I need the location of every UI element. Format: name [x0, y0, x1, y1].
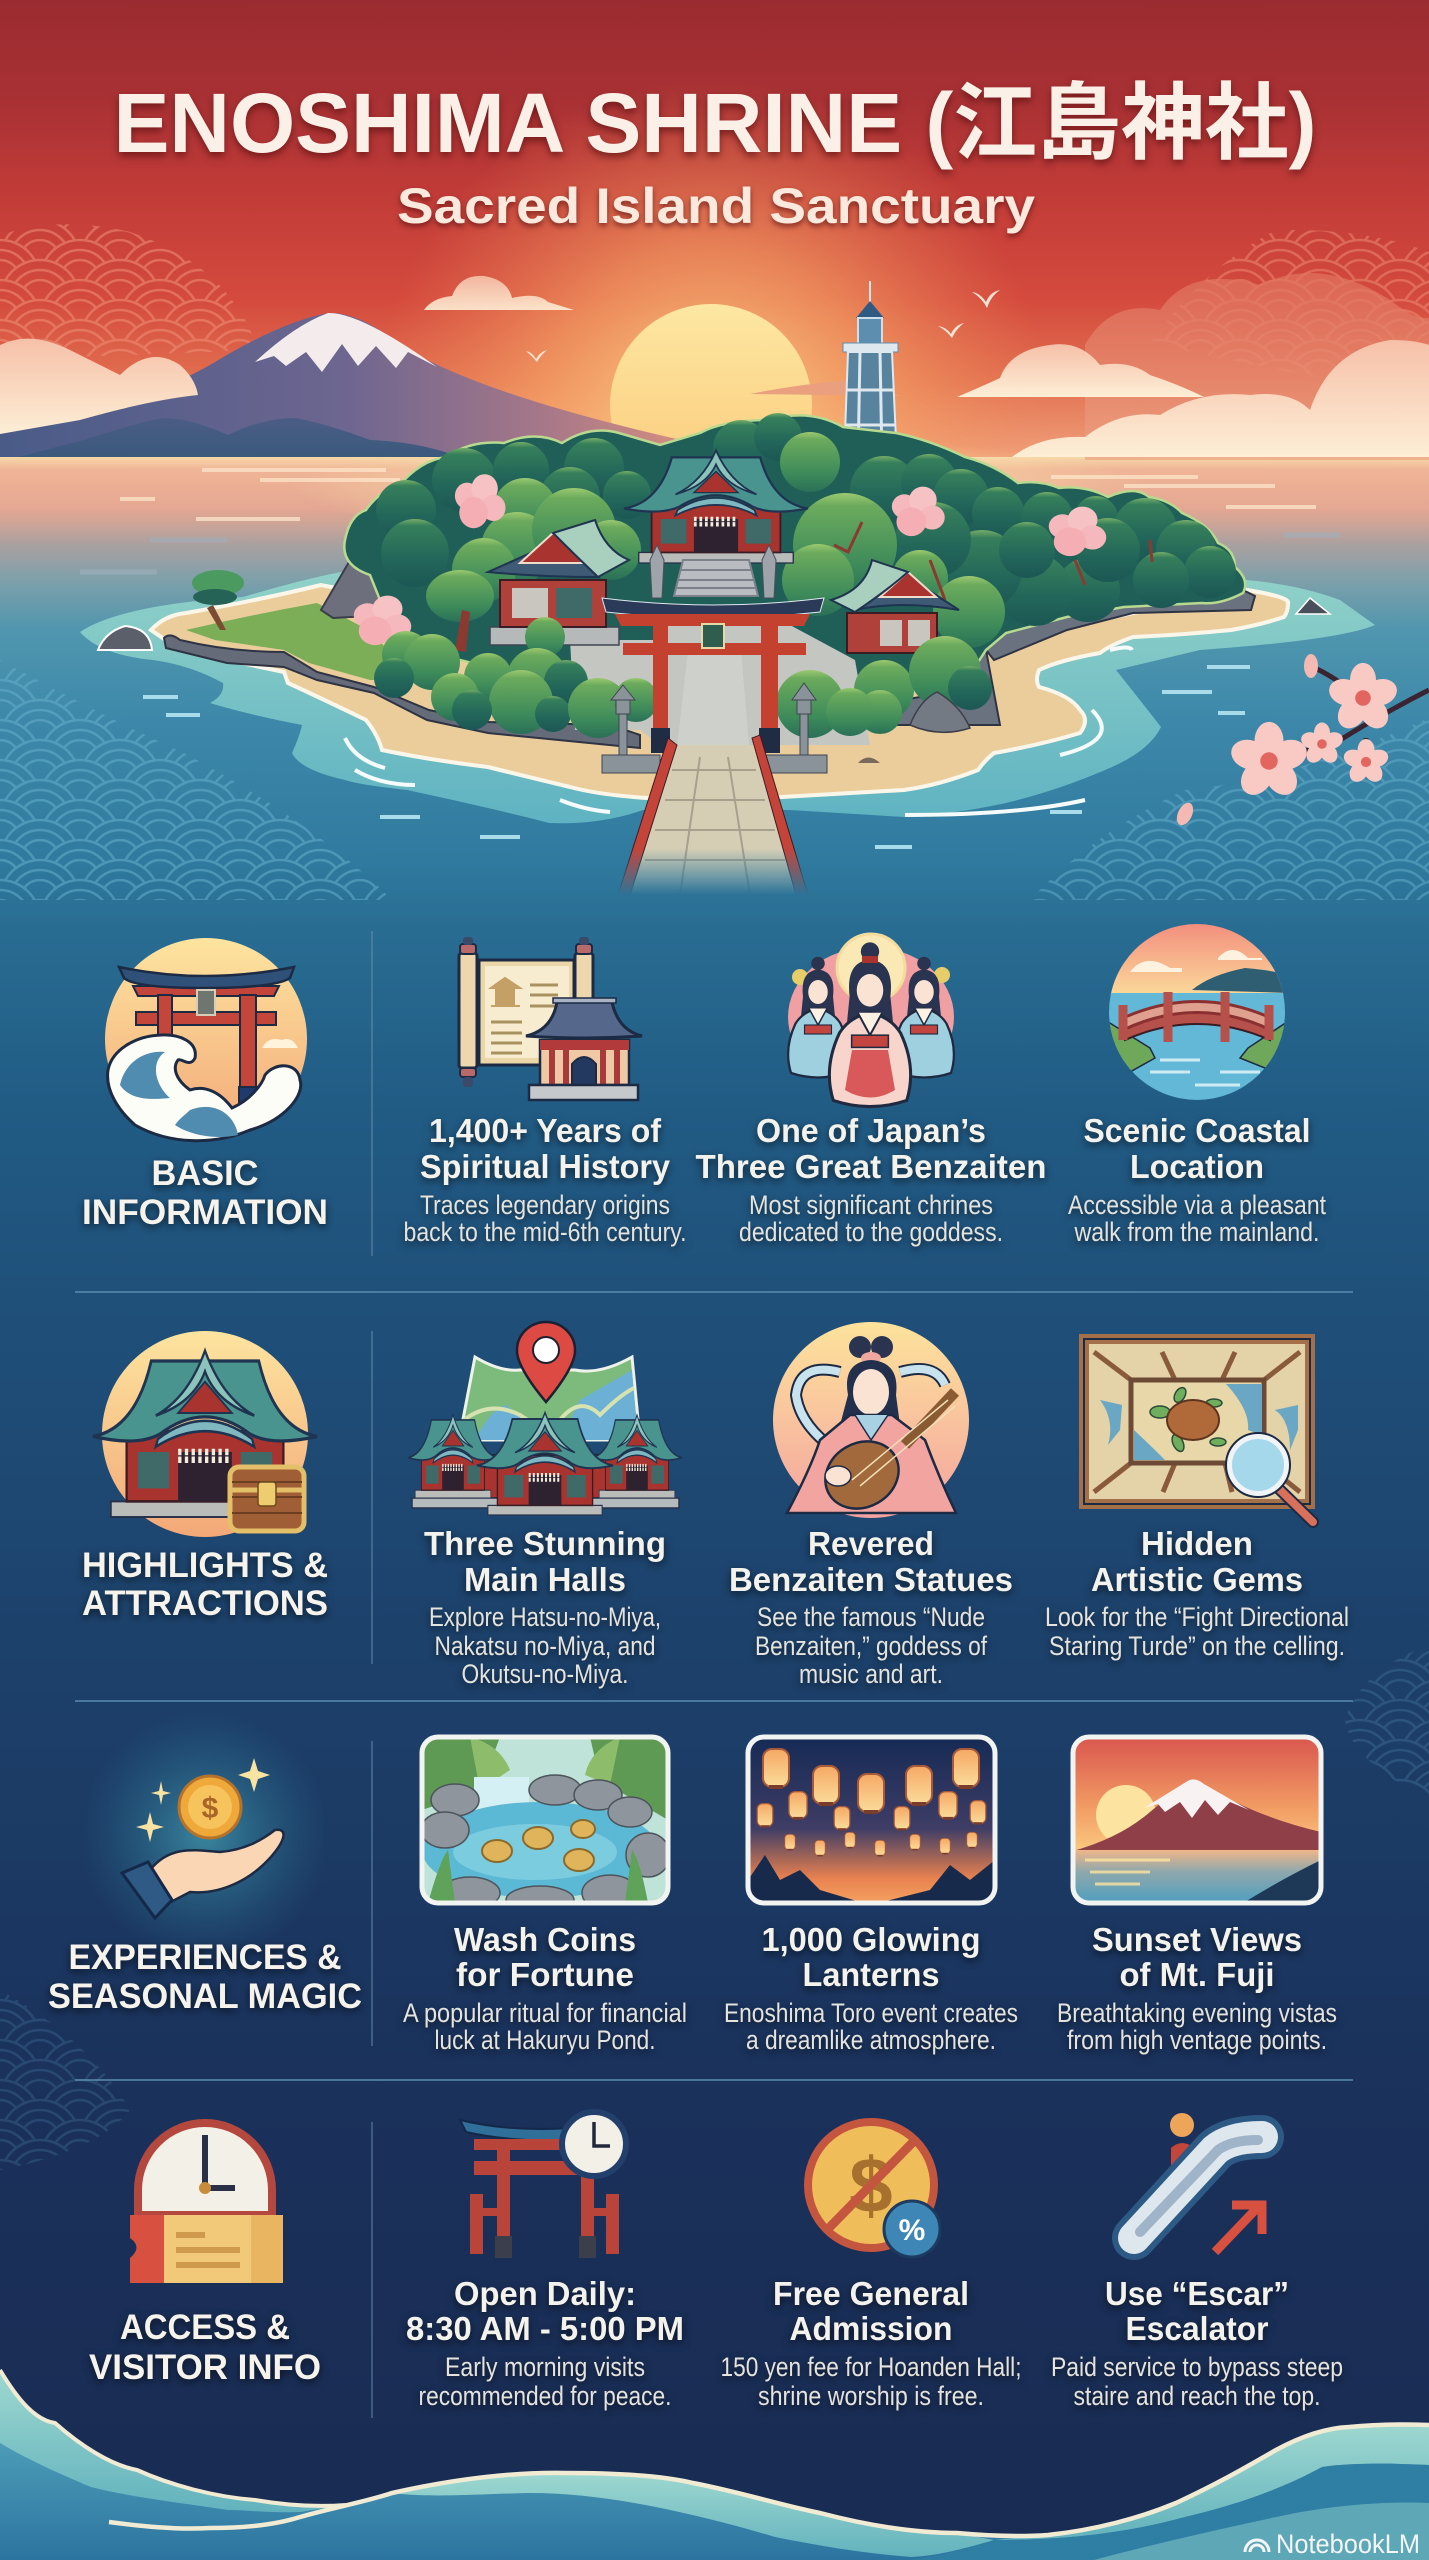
heading: 1,000 Glowing — [762, 1921, 980, 1958]
label: access and visitor info: ACCESS & — [120, 2308, 290, 2347]
dividers — [75, 1292, 1353, 2080]
label: basic information: INFORMATION — [82, 1193, 328, 1232]
heading: Use “Escar” — [1105, 2275, 1289, 2312]
description — [739, 1190, 1003, 1247]
description — [724, 1998, 1018, 2055]
clouds right small — [957, 344, 1204, 397]
pattern: wave motifs by row three — [0, 1990, 130, 2170]
pattern: wave motifs in sky right — [1166, 230, 1429, 335]
background: sunset sky — [0, 0, 1429, 460]
description: Okutsu-no-Miya. — [462, 1659, 628, 1689]
heading: Wash Coins — [454, 1921, 636, 1958]
bridge — [618, 735, 808, 895]
icon: torii with clock — [460, 2112, 626, 2258]
icon: Benzaiten with biwa — [773, 1322, 969, 1522]
description: Enoshima Toro event creates — [724, 1998, 1018, 2028]
sea wall right — [760, 590, 1255, 725]
label: access and visitor info — [89, 2308, 321, 2387]
white foam marks — [345, 648, 1132, 815]
logo: NotebookLM: NotebookLM — [1276, 2529, 1420, 2559]
icon: sunset over Mt. Fuji — [1073, 1737, 1321, 1905]
description: A popular ritual for financial — [403, 1998, 687, 2028]
description: Early morning visits — [445, 2352, 645, 2382]
clouds right large — [1012, 340, 1429, 457]
panel: basic information row — [82, 920, 1326, 1247]
heading: Escalator — [1126, 2310, 1269, 2347]
cliff rock — [321, 562, 423, 618]
left hall — [488, 520, 629, 645]
description: from high ventage points. — [1067, 2025, 1327, 2055]
description: Traces legendary origins — [420, 1190, 670, 1220]
description — [755, 1602, 987, 1689]
rock front — [910, 692, 970, 732]
icon: map pin and three halls — [408, 1322, 682, 1515]
pattern: wave motifs in sea left — [0, 660, 392, 900]
lighthouse — [843, 281, 898, 462]
icon: ceiling turtle and magnifier — [1084, 1339, 1313, 1522]
foliage lobes dark — [376, 413, 1236, 626]
approach path — [676, 650, 750, 757]
illustration: hero scene — [0, 273, 1429, 895]
label: basic information: BASIC — [152, 1154, 258, 1193]
heading: Three Stunning — [424, 1525, 666, 1562]
description: 150 yen fee for Hoanden Hall; — [720, 2352, 1022, 2382]
label: experiences and seasonal magic: SEASONAL MAGIC — [48, 1977, 362, 2016]
description: luck at Hakuryu Pond. — [434, 2025, 656, 2055]
label: experiences and seasonal magic — [48, 1938, 362, 2016]
description: back to the mid-6th century. — [404, 1217, 686, 1247]
icon: three goddesses — [788, 934, 954, 1107]
heading: of Mt. Fuji — [1120, 1956, 1274, 1993]
heading — [424, 1525, 666, 1598]
description: See the famous “Nude — [757, 1602, 985, 1632]
description: Nakatsu no-Miya, and — [434, 1631, 656, 1661]
heading: Spiritual History — [420, 1148, 671, 1185]
description: dedicated to the goddess. — [739, 1217, 1003, 1247]
description: Breathtaking evening vistas — [1057, 1998, 1337, 2028]
icon: hand and coin: $ — [202, 1792, 219, 1825]
heading: Hidden — [1141, 1525, 1253, 1562]
label: highlights and attractions — [82, 1546, 328, 1623]
thin cloud by sun — [750, 380, 900, 396]
description: Explore Hatsu-no-Miya, — [429, 1602, 661, 1632]
label: experiences and seasonal magic: EXPERIENCES & — [68, 1938, 342, 1977]
darker blue right — [911, 2464, 1429, 2560]
description: Look for the “Fight Directional — [1045, 1602, 1349, 1632]
cream edge main — [109, 2424, 1429, 2536]
description: Most significant chrines — [749, 1190, 993, 1220]
icon: clock and ticket — [130, 2123, 283, 2283]
icon: escalator — [1134, 2113, 1262, 2252]
description — [418, 2352, 672, 2411]
mountain — [0, 313, 690, 457]
wave base — [0, 2370, 1429, 2560]
heading: Artistic Gems — [1091, 1561, 1303, 1598]
heading — [1084, 1112, 1310, 1185]
description — [404, 1190, 686, 1247]
description: staire and reach the top. — [1074, 2381, 1320, 2411]
hall front bush — [525, 617, 565, 657]
icon: hand and coin — [80, 1710, 330, 1960]
description — [1051, 2352, 1343, 2411]
icon: shrine and treasure chest — [93, 1331, 317, 1537]
cherry trees on island — [354, 474, 1106, 645]
icon: free coin with percent badge: $ — [849, 2141, 893, 2229]
heading: Revered — [808, 1525, 934, 1562]
rocks — [98, 626, 152, 650]
plaza — [570, 625, 870, 745]
label: access and visitor info: VISITOR INFO — [89, 2348, 321, 2387]
grass — [186, 603, 410, 680]
description: a dreamlike atmosphere. — [746, 2025, 996, 2055]
icon: coin pond — [421, 1737, 670, 1914]
heading: Main Halls — [464, 1561, 626, 1598]
subtitle: Sacred Island Sanctuary — [397, 178, 1035, 234]
description — [403, 1998, 687, 2055]
bottom waves — [0, 2370, 1429, 2560]
clouds left — [0, 339, 198, 434]
pattern: wave motifs in sea right — [1030, 718, 1429, 900]
pale swell bottom right — [1094, 2503, 1429, 2560]
heading: 1,400+ Years of — [429, 1112, 662, 1149]
description: Benzaiten,” goddess of — [755, 1631, 987, 1661]
panel: highlights and attractions row — [82, 1322, 1349, 1689]
label: highlights and attractions: HIGHLIGHTS & — [82, 1546, 328, 1585]
background: sun glow — [371, 80, 1051, 760]
heading: One of Japan’s — [756, 1112, 986, 1149]
sea wall left — [164, 635, 640, 748]
panel: experiences and seasonal magic row — [48, 1710, 1337, 2055]
description: Staring Turde” on the celling. — [1049, 1631, 1345, 1661]
description: recommended for peace. — [418, 2381, 672, 2411]
description: Paid service to bypass steep — [1051, 2352, 1343, 2382]
heading — [1105, 2275, 1289, 2347]
birds — [526, 290, 1000, 362]
heading — [406, 2275, 684, 2347]
stairs — [674, 560, 758, 596]
panel: access and visitor info row — [89, 2112, 1343, 2411]
pattern: wave motifs in sky left — [0, 224, 258, 360]
heading: Scenic Coastal — [1084, 1112, 1310, 1149]
cherry branch — [1174, 654, 1429, 828]
heading — [420, 1112, 671, 1185]
pattern: wave motifs by row two — [1345, 1645, 1429, 1800]
heading: Open Daily: — [454, 2275, 636, 2312]
heading: Lanterns — [802, 1956, 940, 1993]
description — [429, 1602, 661, 1689]
tree trunks — [834, 522, 1152, 600]
description: music and art. — [799, 1659, 943, 1689]
description: shrine worship is free. — [758, 2381, 984, 2411]
small cloud — [424, 276, 574, 310]
right hall — [831, 560, 959, 653]
pale band middle — [392, 2473, 994, 2557]
description — [1045, 1602, 1349, 1661]
pale band left — [0, 2370, 346, 2512]
pebble on beach — [858, 758, 880, 763]
back cloud right — [1085, 273, 1429, 460]
torii gate — [602, 598, 824, 753]
pale band right — [994, 2424, 1429, 2540]
heading: Sunset Views — [1092, 1921, 1302, 1958]
heading — [696, 1112, 1046, 1185]
shallow water — [80, 560, 1375, 823]
background: sun reflection on sea — [290, 436, 1150, 540]
main hall — [624, 450, 808, 563]
heading: Location — [1130, 1148, 1264, 1185]
foliage silhouette — [344, 415, 1245, 700]
description — [1057, 1998, 1337, 2055]
heading: Benzaiten Statues — [729, 1561, 1013, 1598]
darker ripples — [80, 535, 1340, 572]
small stone lanterns — [650, 545, 776, 598]
label: highlights and attractions: ATTRACTIONS — [82, 1584, 328, 1623]
heading: Three Great Benzaiten — [696, 1148, 1046, 1185]
heading — [1092, 1921, 1302, 1993]
icon: free coin with percent badge — [808, 2122, 940, 2257]
heading — [1091, 1525, 1303, 1598]
sea dashes — [143, 667, 1250, 847]
sea ripples — [120, 470, 1316, 519]
title: ENOSHIMA SHRINE (江島神社) — [114, 76, 1316, 170]
heading — [773, 2275, 969, 2347]
heading: for Fortune — [456, 1956, 634, 1993]
cream edge left — [0, 2370, 346, 2506]
icon: free coin with percent badge: % — [899, 2214, 925, 2247]
heading — [454, 1921, 636, 1993]
heading: Free General — [773, 2275, 969, 2312]
description: Accessible via a pleasant — [1068, 1190, 1326, 1220]
heading: Admission — [790, 2310, 952, 2347]
sun — [610, 304, 812, 506]
description: walk from the mainland. — [1074, 1217, 1320, 1247]
icon: scroll and shrine — [459, 937, 642, 1100]
heading — [762, 1921, 980, 1993]
foliage lobes light — [452, 432, 1005, 648]
heading — [729, 1525, 1013, 1598]
trees front left — [374, 570, 658, 738]
description — [1068, 1190, 1326, 1247]
label: basic information — [82, 1154, 328, 1232]
icon: coastal bridge — [1105, 920, 1290, 1103]
stone lanterns — [602, 683, 827, 773]
beach — [151, 585, 1288, 798]
icon: glowing lanterns — [748, 1737, 995, 1905]
heading: 8:30 AM - 5:00 PM — [406, 2310, 684, 2347]
small pine — [192, 570, 244, 630]
icon: torii and wave — [105, 938, 307, 1141]
description — [720, 2352, 1022, 2411]
trees front right — [776, 636, 992, 738]
